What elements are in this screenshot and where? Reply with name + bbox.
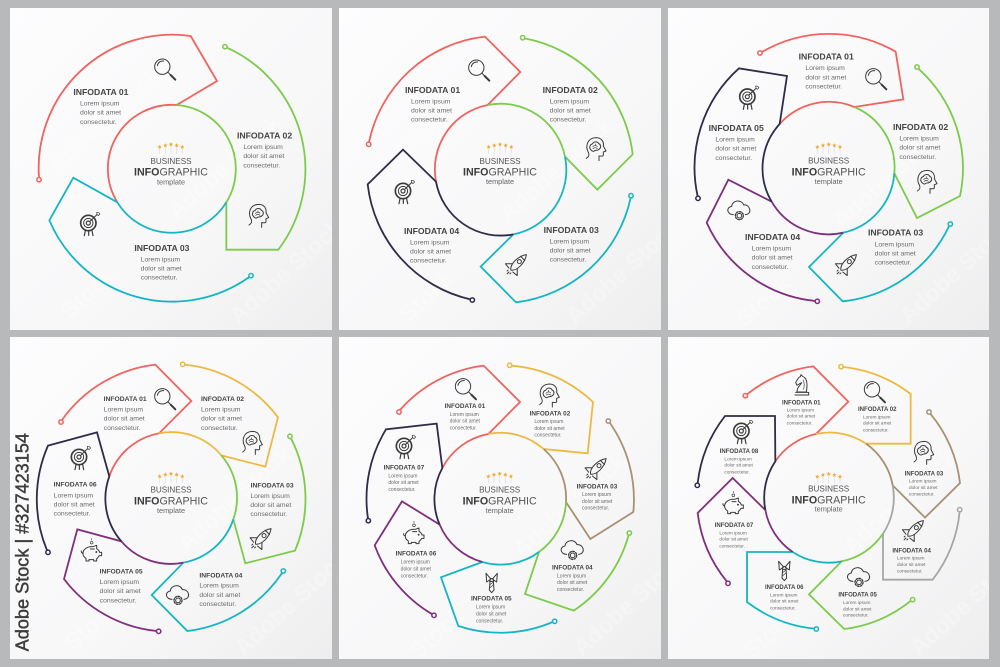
text: INFODATA 05: Lorem ipsum: [100, 579, 139, 586]
panel: seven-step circular infographic: Adobe Stock: [508, 448, 631, 562]
text: INFODATA 03: INFODATA 03: [251, 482, 294, 489]
text: INFODATA 02: INFODATA 02: [543, 85, 598, 95]
text: INFODATA 08: dolor sit amet: [724, 463, 754, 469]
text: INFODATA 01: INFODATA 01: [405, 85, 460, 95]
icon: magnifier: [866, 69, 886, 89]
text: INFODATA 05: consectetur.: [843, 613, 869, 619]
centre title: BUSINESS: [479, 486, 521, 495]
panel: four-step circular infographic: Adobe Stock: [494, 112, 618, 227]
text: INFODATA 03: [577, 483, 618, 512]
panel: three-step circular infographic: [1, 0, 348, 330]
icon: head: [586, 138, 606, 161]
centre title: INFOGRAPHIC: [134, 496, 208, 508]
text: INFODATA 05: INFODATA 05: [838, 593, 877, 599]
centre title: INFOGRAPHIC: [463, 496, 537, 508]
text: INFODATA 01: Lorem ipsum: [80, 100, 120, 107]
segment 03 brown: [544, 419, 634, 539]
text: INFODATA 04: Lorem ipsum: [897, 556, 924, 562]
segment 04 dark navy: [368, 150, 513, 302]
icon: magnifier: [469, 60, 489, 81]
text: INFODATA 03: dolor sit amet: [875, 250, 916, 257]
text: INFODATA 04: dolor sit amet: [752, 255, 793, 262]
icon: head: [914, 441, 934, 464]
icon: magnifier: [864, 382, 885, 402]
text: INFODATA 01: INFODATA 01: [104, 396, 147, 403]
text: INFODATA 01: [104, 396, 147, 432]
text: INFODATA 01: dolor sit amet: [787, 414, 816, 420]
icon: head: [917, 170, 937, 193]
text: INFODATA 08: consectetur.: [724, 469, 750, 475]
text: INFODATA 05: consectetur.: [715, 155, 752, 162]
text: INFODATA 05: [838, 593, 877, 619]
text: INFODATA 03: Lorem ipsum: [141, 256, 180, 263]
text: INFODATA 01: consectetur.: [80, 119, 117, 126]
icon: necktie: [486, 573, 497, 593]
text: INFODATA 06: [396, 551, 437, 579]
text: INFODATA 01: [73, 87, 129, 126]
panel: four-step circular infographic: Stock: [394, 265, 459, 327]
icon: head: [243, 431, 262, 454]
segment 01 red: [59, 365, 191, 476]
centre title: template: [486, 506, 514, 515]
text: INFODATA 02: Lorem ipsum: [201, 407, 241, 414]
segment 01 red: [743, 366, 848, 461]
text: INFODATA 02: Lorem ipsum: [550, 98, 589, 105]
icon: cloud with gear: [561, 541, 583, 559]
centre title: [134, 471, 208, 515]
text: INFODATA 05: consectetur.: [476, 618, 503, 624]
text: INFODATA 01: consectetur.: [450, 426, 477, 432]
text: INFODATA 06: Lorem ipsum: [54, 492, 93, 499]
centre title: INFOGRAPHIC: [792, 494, 866, 506]
text: INFODATA 07: consectetur.: [388, 487, 416, 493]
text: INFODATA 01: dolor sit amet: [104, 416, 145, 423]
text: INFODATA 04: Lorem ipsum: [410, 239, 450, 246]
text: INFODATA 02: [237, 131, 292, 169]
text: INFODATA 01: [405, 85, 460, 124]
centre title: INFOGRAPHIC: [134, 167, 208, 179]
panel: six-step circular infographic: Adobe Stock: [173, 441, 296, 556]
text: INFODATA 07: INFODATA 07: [384, 464, 425, 471]
text: INFODATA 03: Lorem ipsum: [875, 241, 914, 248]
centre title: [463, 142, 537, 186]
text: INFODATA 04: consectetur.: [897, 569, 923, 575]
text: INFODATA 03: [250, 482, 294, 518]
text: INFODATA 02: dolor sit amet: [550, 108, 591, 115]
segment 01 red: [366, 37, 520, 182]
segment 05 teal: [441, 552, 557, 633]
text: INFODATA 01: Lorem ipsum: [450, 412, 479, 418]
text: INFODATA 01: INFODATA 01: [782, 400, 821, 406]
text: INFODATA 03: dolor sit amet: [582, 499, 613, 505]
text: INFODATA 06: [54, 482, 97, 518]
text: INFODATA 02: dolor sit amet: [899, 145, 940, 152]
text: INFODATA 03: INFODATA 03: [905, 471, 944, 477]
text: INFODATA 04: [404, 226, 459, 265]
text: INFODATA 06: INFODATA 06: [396, 551, 437, 558]
text: INFODATA 05: [471, 596, 512, 624]
centre title: BUSINESS: [150, 486, 192, 495]
segment 06 teal: [747, 552, 842, 631]
text: INFODATA 06: consectetur.: [770, 605, 796, 611]
text: INFODATA 05: INFODATA 05: [709, 123, 764, 133]
icon: cloud with gear: [166, 586, 189, 604]
centre title: [134, 142, 208, 186]
text: INFODATA 04: [552, 564, 593, 593]
text: INFODATA 05: INFODATA 05: [471, 596, 512, 603]
centre title: INFOGRAPHIC: [463, 167, 537, 179]
centre title: [792, 142, 866, 186]
text: INFODATA 03: INFODATA 03: [868, 228, 923, 238]
text: INFODATA 06: Lorem ipsum: [401, 560, 430, 566]
text: INFODATA 01: consectetur.: [104, 425, 141, 432]
panel: seven-step circular infographic: [339, 337, 661, 659]
text: INFODATA 04: INFODATA 04: [892, 548, 931, 554]
text: INFODATA 02: [893, 122, 948, 161]
text: INFODATA 04: dolor sit amet: [199, 592, 240, 599]
icon: piggy bank: [404, 521, 424, 544]
centre title: [463, 471, 537, 515]
icon: chess knight: [795, 375, 809, 395]
text: INFODATA 03: Lorem ipsum: [909, 479, 936, 485]
text: INFODATA 07: dolor sit amet: [388, 480, 419, 486]
text: INFODATA 01: consectetur.: [787, 420, 812, 426]
text: INFODATA 03: [905, 471, 944, 497]
icon: magnifier: [455, 379, 476, 399]
segment 03 teal: [481, 157, 633, 302]
text: INFODATA 04: INFODATA 04: [404, 226, 459, 236]
text: INFODATA 06: dolor sit amet: [770, 599, 799, 605]
text: INFODATA 03: dolor sit amet: [909, 485, 938, 491]
text: INFODATA 02: INFODATA 02: [530, 410, 571, 417]
segment 03 teal: [809, 173, 952, 301]
segment 01 red: [37, 35, 217, 202]
icon: piggy bank: [81, 539, 102, 561]
text: INFODATA 02: [201, 396, 244, 432]
text: INFODATA 06: dolor sit amet: [54, 501, 95, 508]
panel: eight-step circular infographic: Adobe: [668, 328, 739, 396]
segment 04 purple: [707, 180, 843, 303]
text: INFODATA 01: dolor sit amet: [450, 419, 481, 425]
segment 06 purple: [375, 501, 482, 617]
text: INFODATA 03: consectetur.: [582, 506, 609, 512]
text: INFODATA 02: Lorem ipsum: [899, 136, 939, 143]
panel: eight-step circular infographic: Adobe Stock: [838, 444, 961, 559]
segment 01 red: [397, 366, 520, 468]
icon: cloud with gear: [728, 201, 750, 220]
text: INFODATA 03: INFODATA 03: [577, 483, 618, 490]
segment 03 brown: [866, 410, 960, 518]
text: INFODATA 01: [799, 52, 854, 90]
text: INFODATA 03: Lorem ipsum: [550, 238, 589, 245]
text: INFODATA 02: INFODATA 02: [237, 131, 292, 141]
text: INFODATA 02: [858, 407, 897, 433]
stock id caption: Adobe Stock | #327423154: [12, 433, 33, 651]
text: INFODATA 07: INFODATA 07: [715, 523, 754, 529]
text: INFODATA 08: [720, 449, 759, 475]
segment 06 dark navy: [37, 432, 121, 554]
segment 04 teal: [152, 519, 285, 631]
text: INFODATA 01: Lorem ipsum: [787, 407, 814, 413]
text: INFODATA 05: dolor sit amet: [476, 611, 507, 617]
centre title: template: [157, 506, 185, 515]
panel: five-step circular infographic: Adobe: [661, 0, 732, 67]
text: INFODATA 04: INFODATA 04: [745, 232, 800, 242]
text: INFODATA 02: INFODATA 02: [893, 122, 948, 132]
panel: five-step circular infographic: Adobe Stock: [828, 119, 951, 234]
panel: five-step circular infographic: Adobe Stock: [711, 66, 834, 180]
text: INFODATA 05: Lorem ipsum: [843, 600, 870, 606]
panel: six-step circular infographic: [10, 337, 332, 659]
text: INFODATA 01: Lorem ipsum: [104, 407, 143, 414]
text: INFODATA 03: Lorem ipsum: [582, 492, 611, 498]
text: INFODATA 04: consectetur.: [199, 601, 236, 608]
segment 02 green: [488, 35, 633, 190]
centre title: BUSINESS: [150, 157, 192, 166]
icon: rocket: [831, 249, 862, 280]
text: INFODATA 02: dolor sit amet: [863, 421, 892, 427]
text: INFODATA 04: INFODATA 04: [552, 564, 593, 571]
centre title: template: [815, 177, 843, 186]
text: INFODATA 01: dolor sit amet: [805, 74, 846, 81]
segment 03 teal: [49, 178, 253, 302]
text: INFODATA 03: [868, 228, 923, 267]
segment 02 green: [177, 44, 305, 250]
text: INFODATA 02: dolor sit amet: [201, 416, 242, 423]
panel: four-step circular infographic: Adobe Stock: [371, 66, 494, 180]
text: INFODATA 02: consectetur.: [550, 117, 587, 124]
text: INFODATA 03: consectetur.: [550, 257, 587, 264]
icon: magnifier: [155, 389, 175, 409]
icon: target: [734, 420, 753, 444]
text: INFODATA 03: [134, 243, 190, 282]
text: INFODATA 05: Lorem ipsum: [476, 605, 505, 611]
icon: rocket: [581, 453, 612, 484]
text: INFODATA 04: [199, 572, 243, 608]
panel: eight-step circular infographic: Stock: [738, 602, 802, 664]
segment 07 dark navy: [366, 424, 442, 525]
panel: three-step circular infographic: Adobe Stock: [224, 214, 348, 329]
panel: five-step circular infographic: [661, 0, 1000, 332]
text: INFODATA 03: INFODATA 03: [544, 225, 599, 235]
text: INFODATA 05: dolor sit amet: [715, 146, 756, 153]
segment 04 grey: [883, 485, 962, 580]
text: INFODATA 02: Lorem ipsum: [243, 144, 283, 151]
text: INFODATA 04: dolor sit amet: [410, 248, 451, 255]
text: INFODATA 04: dolor sit amet: [557, 580, 588, 586]
text: INFODATA 01: dolor sit amet: [80, 110, 121, 117]
segment 02 yellow: [159, 362, 278, 467]
segment 03 green: [221, 434, 305, 563]
text: INFODATA 05: dolor sit amet: [843, 606, 872, 612]
text: INFODATA 04: consectetur.: [557, 587, 584, 593]
panel: three-step circular infographic: Stock: [56, 262, 121, 324]
text: INFODATA 01: Lorem ipsum: [805, 65, 845, 72]
text: INFODATA 02: Lorem ipsum: [863, 414, 890, 420]
icon: magnifier: [155, 59, 175, 80]
text: INFODATA 02: Lorem ipsum: [534, 419, 564, 425]
text: INFODATA 03: consectetur.: [141, 275, 178, 282]
text: INFODATA 07: dolor sit amet: [719, 537, 749, 543]
icon: target: [395, 180, 415, 204]
segment 01 red: [758, 34, 903, 124]
icon: piggy bank: [723, 491, 743, 514]
panel: six-step circular infographic: Adobe Stock: [229, 546, 353, 661]
segment 02 yellow: [816, 364, 911, 444]
text: INFODATA 02: dolor sit amet: [534, 426, 565, 432]
segment 07 purple: [698, 478, 793, 585]
text: INFODATA 07: [715, 523, 754, 549]
text: INFODATA 03: consectetur.: [909, 491, 935, 497]
panel: seven-step circular infographic: Stock: [404, 602, 469, 664]
icon: target: [71, 446, 91, 470]
text: INFODATA 06: [765, 585, 804, 611]
text: INFODATA 08: INFODATA 08: [720, 449, 759, 455]
text: INFODATA 03: dolor sit amet: [550, 247, 591, 254]
segment 04 green: [525, 502, 631, 611]
text: INFODATA 04: Lorem ipsum: [199, 583, 239, 590]
icon: necktie: [779, 561, 790, 581]
panel: five-step circular infographic: Stock: [731, 270, 796, 332]
icon: rocket: [246, 523, 277, 554]
text: INFODATA 04: INFODATA 04: [199, 572, 243, 579]
text: INFODATA 01: consectetur.: [805, 83, 842, 90]
text: INFODATA 02: dolor sit amet: [243, 153, 284, 160]
text: INFODATA 06: dolor sit amet: [401, 567, 432, 573]
text: INFODATA 01: consectetur.: [411, 117, 448, 124]
text: INFODATA 04: consectetur.: [410, 258, 447, 265]
text: INFODATA 03: dolor sit amet: [250, 502, 291, 509]
text: INFODATA 05: INFODATA 05: [100, 568, 143, 575]
panel: four-step circular infographic: Adobe Stock: [561, 214, 684, 329]
text: INFODATA 04: consectetur.: [752, 264, 789, 271]
text: INFODATA 03: INFODATA 03: [134, 243, 190, 253]
text: INFODATA 01: INFODATA 01: [799, 52, 854, 62]
text: INFODATA 07: Lorem ipsum: [719, 530, 747, 536]
text: INFODATA 02: consectetur.: [863, 427, 889, 433]
text: INFODATA 06: Lorem ipsum: [770, 592, 797, 598]
centre title: BUSINESS: [808, 485, 850, 494]
icon: head: [249, 204, 269, 227]
centre title: INFOGRAPHIC: [792, 167, 866, 179]
text: INFODATA 03: consectetur.: [875, 260, 912, 267]
panel: six-step circular infographic: Adobe Stock: [53, 388, 176, 502]
centre title: template: [486, 177, 514, 186]
panel: four-step circular infographic: [339, 8, 661, 330]
text: INFODATA 01: INFODATA 01: [445, 403, 486, 410]
text: INFODATA 01: [445, 403, 486, 432]
icon: target: [81, 212, 100, 236]
panel: six-step circular infographic: Stock: [59, 594, 124, 656]
text: INFODATA 02: consectetur.: [899, 154, 936, 161]
text: INFODATA 03: [544, 225, 599, 264]
centre title: BUSINESS: [808, 157, 850, 166]
panel: seven-step circular infographic: Adobe: [338, 328, 409, 396]
text: INFODATA 06: INFODATA 06: [765, 585, 804, 591]
centre title: template: [157, 177, 185, 186]
text: INFODATA 05: [100, 568, 143, 604]
text: INFODATA 02: INFODATA 02: [858, 407, 897, 413]
text: INFODATA 02: [543, 85, 598, 124]
text: INFODATA 08: Lorem ipsum: [724, 456, 752, 462]
text: INFODATA 07: consectetur.: [719, 543, 745, 549]
icon: target: [396, 435, 416, 459]
text: INFODATA 03: consectetur.: [250, 511, 287, 518]
text: INFODATA 05: dolor sit amet: [100, 588, 141, 595]
panel: three-step circular infographic: Adobe Stock: [163, 109, 286, 224]
text: INFODATA 05: Lorem ipsum: [715, 137, 755, 144]
icon: rocket: [898, 515, 929, 546]
text: INFODATA 04: Lorem ipsum: [752, 246, 791, 253]
text: INFODATA 02: [530, 410, 571, 439]
text: INFODATA 04: [892, 548, 931, 575]
text: INFODATA 04: [745, 232, 800, 271]
icon: rocket: [501, 249, 532, 280]
segment 05 purple: [64, 529, 183, 633]
text: INFODATA 06: INFODATA 06: [54, 482, 97, 489]
text: INFODATA 01: dolor sit amet: [411, 108, 452, 115]
text: INFODATA 02: consectetur.: [201, 425, 238, 432]
text: INFODATA 05: consectetur.: [100, 597, 137, 604]
panel: three-step circular infographic: Adobe Stock: [43, 62, 166, 177]
text: INFODATA 06: consectetur.: [54, 511, 91, 518]
centre title: BUSINESS: [479, 157, 521, 166]
text: INFODATA 02: INFODATA 02: [201, 396, 244, 403]
text: INFODATA 03: Lorem ipsum: [250, 493, 290, 500]
segment 02 yellow: [488, 363, 593, 453]
centre title: [792, 472, 866, 514]
text: INFODATA 01: [782, 400, 821, 426]
panel: seven-step circular infographic: Adobe Stock: [568, 546, 691, 661]
segment 05 dark navy: [695, 68, 787, 202]
panel: seven-step circular infographic: Adobe Stock: [384, 388, 508, 502]
text: INFODATA 07: Lorem ipsum: [388, 473, 418, 479]
panel: eight-step circular infographic: [668, 328, 1000, 664]
text: INFODATA 07: [384, 464, 425, 493]
text: INFODATA 01: INFODATA 01: [73, 87, 129, 97]
icon: target: [740, 86, 759, 109]
panel: eight-step circular infographic: Adobe Stock: [714, 388, 838, 502]
text: INFODATA 02: consectetur.: [243, 162, 280, 169]
text: INFODATA 01: Lorem ipsum: [411, 98, 451, 105]
centre title: template: [815, 505, 843, 514]
panel: six-step circular infographic: Adobe: [6, 321, 77, 389]
icon: head: [540, 384, 559, 407]
text: INFODATA 02: consectetur.: [534, 433, 562, 439]
segment 08 dark navy: [695, 416, 775, 510]
text: INFODATA 03: dolor sit amet: [141, 266, 182, 273]
text: INFODATA 04: dolor sit amet: [897, 562, 926, 568]
icon: cloud with gear: [847, 568, 870, 586]
segment 02 green: [854, 65, 963, 218]
text: INFODATA 05: [709, 123, 764, 162]
segment 05 green: [809, 534, 915, 629]
text: INFODATA 06: consectetur.: [401, 573, 428, 579]
text: INFODATA 04: Lorem ipsum: [557, 573, 586, 579]
